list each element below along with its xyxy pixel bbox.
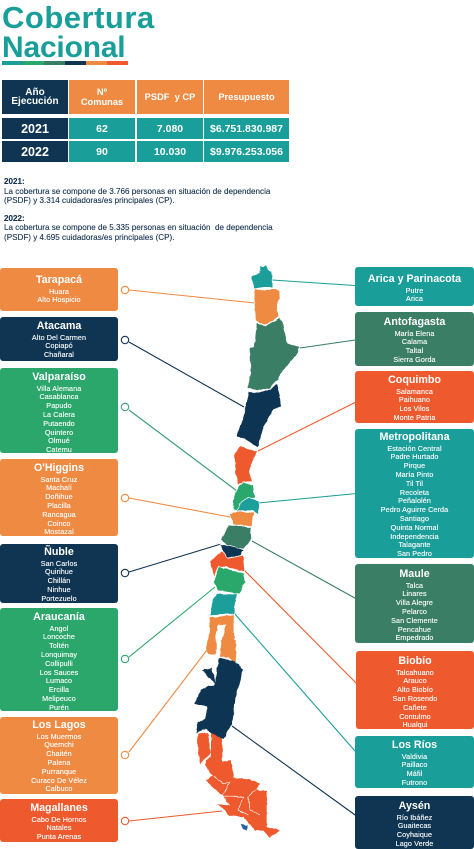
panel: Valparaíso: La Calera xyxy=(43,410,75,419)
coverage table: 2021 xyxy=(21,122,49,136)
panel: Atacama: Alto Del Carmen xyxy=(32,332,86,342)
panel: Arica y Parinacota xyxy=(355,267,474,306)
panel: Biobío: Hualqui xyxy=(402,720,428,729)
panel: Antofagasta: María Elena xyxy=(395,328,434,338)
panel: Antofagasta: Antofagasta xyxy=(384,316,445,328)
coverage table: 2022 xyxy=(21,144,49,158)
panel: Tarapacá: Tarapacá xyxy=(36,274,82,286)
southern regions xyxy=(194,640,280,838)
panel: Metropolitana: Independencia xyxy=(390,532,439,541)
panel: Araucanía: Los Sauces xyxy=(40,668,78,677)
panel: Araucanía: Angol xyxy=(50,624,68,632)
panel: Ñuble: Quirihue xyxy=(45,567,73,576)
coverage table: $9.976.253.056 xyxy=(210,146,283,158)
panel: Valparaíso: Villa Alemana xyxy=(37,384,81,392)
panel: Coquimbo: Monte Patria xyxy=(394,413,435,422)
panel: Ñuble: Ninhue xyxy=(47,585,71,594)
panel: Maule: Empedrado xyxy=(395,633,434,642)
panel: Tarapacá xyxy=(0,268,118,311)
panel: Metropolitana: Peñalolén xyxy=(398,496,431,505)
panel: Maule: Talca xyxy=(406,580,423,590)
coverage table: 10.030 xyxy=(154,146,186,158)
coverage table: $6.751.830.987 xyxy=(210,122,283,134)
panel: Metropolitana: María Pinto xyxy=(396,470,433,479)
panel: Ñuble: Portezuelo xyxy=(41,594,77,603)
panel: Metropolitana: San Pedro xyxy=(397,549,432,558)
panel: Aysén: Coyhaique xyxy=(397,830,432,839)
panel: Los Lagos xyxy=(0,717,118,794)
note 2021: (PSDF) y 3.314 cuidadoras/es principales (CP). xyxy=(4,196,174,205)
panel: O'Higgins: Placilla xyxy=(47,501,71,510)
panel: Metropolitana: Estación Central xyxy=(387,444,442,452)
note 2022: (PSDF) y 4.695 cuidadoras/es principales (CP). xyxy=(4,232,174,242)
panel: Valparaíso: Valparaíso xyxy=(32,371,86,383)
panel: Tarapacá: Alto Hospicio xyxy=(37,295,81,304)
panel: O'Higgins: Santa Cruz xyxy=(41,474,77,484)
panel: Metropolitana: Recoleta xyxy=(400,488,429,497)
note 2021: 2021: xyxy=(4,177,25,186)
panel: Maule: Maule xyxy=(399,568,430,580)
panel: Maule: Pencahue xyxy=(398,625,431,634)
panel: Aysén: Río Ibáñez xyxy=(397,812,432,822)
panel: Los Ríos: Paillaco xyxy=(402,760,427,769)
panel: Ñuble: Chillán xyxy=(48,576,70,585)
title: Cobertura xyxy=(2,0,155,35)
panel: Metropolitana: Pirque xyxy=(404,461,425,470)
northern regions xyxy=(237,265,300,447)
panel: Los Ríos xyxy=(355,736,474,788)
panel: Araucanía: Araucanía xyxy=(33,611,85,623)
panel: Magallanes: Natales xyxy=(46,823,72,832)
panel: Magallanes: Magallanes xyxy=(30,802,88,814)
panel: O'Higgins xyxy=(0,459,118,536)
panel: Los Ríos: Valdivia xyxy=(402,752,427,760)
panel: Valparaíso: Olmué xyxy=(48,436,70,445)
panel: Aysén: Guaitecas xyxy=(398,821,431,830)
panel: Los Lagos: Chaitén xyxy=(46,749,72,758)
panel: Los Lagos: Los Muermos xyxy=(37,732,81,740)
panel: Valparaíso: Papudo xyxy=(46,401,72,410)
panel: Aysén: Lago Verde xyxy=(396,839,433,848)
panel: Biobío: Cañete xyxy=(403,703,427,712)
panel: O'Higgins: O'Higgins xyxy=(34,462,84,474)
coverage table: Nº xyxy=(97,87,107,97)
panel: O'Higgins: Mostazal xyxy=(44,527,74,536)
panel: Ñuble: San Carlos xyxy=(41,558,77,568)
panel: Maule: Linares xyxy=(402,589,427,598)
panel: Biobío: Arauco xyxy=(403,676,427,685)
title xyxy=(2,0,155,64)
panel: Biobío xyxy=(356,651,474,729)
panel: Metropolitana: Til Til xyxy=(406,479,423,488)
panel: Los Lagos: Curaco De Vélez xyxy=(31,776,87,785)
connector lines xyxy=(121,280,370,826)
panel: Los Lagos: Purranque xyxy=(42,767,76,776)
panel: Tarapacá: Huara xyxy=(49,286,69,296)
panel: Magallanes: Cabo De Hornos xyxy=(32,814,86,824)
panel: Coquimbo: Salamanca xyxy=(396,386,433,396)
panel: Maule: Pelarco xyxy=(402,607,427,616)
title underline colour bar xyxy=(2,61,128,65)
panel: Antofagasta xyxy=(355,312,474,366)
coverage table: 90 xyxy=(96,146,108,158)
panel: Maule: Villa Alegre xyxy=(396,598,433,607)
panel: Coquimbo xyxy=(355,371,474,423)
panel: Araucanía: Lonquimay xyxy=(41,650,77,659)
central regions xyxy=(206,445,259,650)
panel: Arica y Parinacota: Putre xyxy=(406,286,423,294)
note 2021 xyxy=(4,177,270,205)
panel: Valparaíso xyxy=(0,368,118,453)
panel: Coquimbo: Coquimbo xyxy=(388,374,441,386)
panel: Biobío: Biobío xyxy=(398,655,432,667)
panel: Antofagasta: Taltal xyxy=(406,346,423,355)
panel: Biobío: San Rosendo xyxy=(393,694,437,703)
note 2022: 2022: xyxy=(4,214,25,222)
coverage table: Comunas xyxy=(81,97,123,107)
panel: Los Lagos: Los Lagos xyxy=(32,719,86,731)
panel: Ñuble: Ñuble xyxy=(44,546,74,558)
panel: Magallanes xyxy=(0,799,118,842)
coverage table: 62 xyxy=(96,122,108,134)
panel: Biobío: Contulmo xyxy=(399,712,431,721)
panel: Magallanes: Punta Arenas xyxy=(37,832,81,841)
panel: Maule xyxy=(355,564,474,643)
panel: Valparaíso: Casablanca xyxy=(40,392,78,401)
panel: Biobío: Talcahuano xyxy=(396,668,434,676)
panel: Los Ríos: Futrono xyxy=(402,778,427,787)
panel: O'Higgins: Rancagua xyxy=(42,510,76,519)
panel: Valparaíso: Catemu xyxy=(46,445,72,454)
panel: Atacama: Copiapó xyxy=(45,341,73,350)
panel: Valparaíso: Quintero xyxy=(45,428,73,437)
panel: Antofagasta: Sierra Gorda xyxy=(393,355,436,364)
panel: Maule: San Clemente xyxy=(391,616,438,625)
panel: Araucanía: Loncoche xyxy=(43,632,75,641)
panel: Metropolitana: Talagante xyxy=(398,540,431,549)
panel: O'Higgins: Coinco xyxy=(48,519,70,528)
panel: Araucanía: Toltén xyxy=(49,641,69,650)
panel: Los Ríos: Máfil xyxy=(407,769,422,778)
note 2022: La cobertura se compone de 5.335 personas en situación de dependencia xyxy=(4,223,273,232)
panel: Metropolitana: Quinta Normal xyxy=(391,523,438,532)
panel: O'Higgins: Machalí xyxy=(46,483,72,492)
panel: Atacama: Chañaral xyxy=(44,350,74,359)
panel: Metropolitana: Padre Hurtado xyxy=(390,452,439,461)
panel: Araucanía: Purén xyxy=(49,703,69,712)
panel: Metropolitana: Metropolitana xyxy=(379,431,450,443)
panel: Atacama: Atacama xyxy=(37,320,81,332)
panel: Araucanía xyxy=(0,608,118,711)
panel: Los Lagos: Quemchi xyxy=(44,740,74,749)
panel: O'Higgins: Doñihue xyxy=(45,492,73,501)
panel: Los Lagos: Calbuco xyxy=(45,784,73,793)
panel: Atacama xyxy=(0,317,118,361)
title: Nacional xyxy=(2,31,125,64)
panel: Araucanía: Melipeuco xyxy=(42,694,76,703)
coverage table: Presupuesto xyxy=(218,92,275,102)
panel: Ñuble xyxy=(0,544,118,603)
panel: Biobío: Alto Biobío xyxy=(397,685,433,694)
panel: Metropolitana: Santiago xyxy=(400,514,429,523)
coverage table: 7.080 xyxy=(157,122,183,134)
panel: Arica y Parinacota: Arica y Parinacota xyxy=(368,273,461,285)
panel: Araucanía: Lumaco xyxy=(46,676,72,685)
panel: Antofagasta: Calama xyxy=(402,337,427,346)
panel: Los Ríos: Los Ríos xyxy=(392,739,437,751)
note 2022 xyxy=(4,214,273,242)
coverage table xyxy=(2,80,289,162)
panel: Araucanía: Ercilla xyxy=(49,685,69,694)
panel: Araucanía: Collipulli xyxy=(45,659,73,668)
panel: Los Lagos: Palena xyxy=(48,758,70,767)
panel: Coquimbo: Los Vilos xyxy=(400,404,429,413)
panel: Valparaíso: Putaendo xyxy=(43,419,75,428)
note 2021: La cobertura se compone de 3.766 personas en situación de dependencia xyxy=(4,186,270,196)
panel: Coquimbo: Paihuano xyxy=(399,395,430,404)
coverage table: Ejecución xyxy=(11,96,59,107)
panel: Arica y Parinacota: Arica xyxy=(406,294,423,303)
coverage table: Año xyxy=(25,86,45,98)
panel: Aysén xyxy=(355,796,474,849)
panel: Metropolitana: Pedro Aguirre Cerda xyxy=(381,505,448,514)
panel: Metropolitana xyxy=(355,429,474,558)
coverage table: PSDF y CP xyxy=(145,92,195,102)
panel: Aysén: Aysén xyxy=(399,800,430,812)
